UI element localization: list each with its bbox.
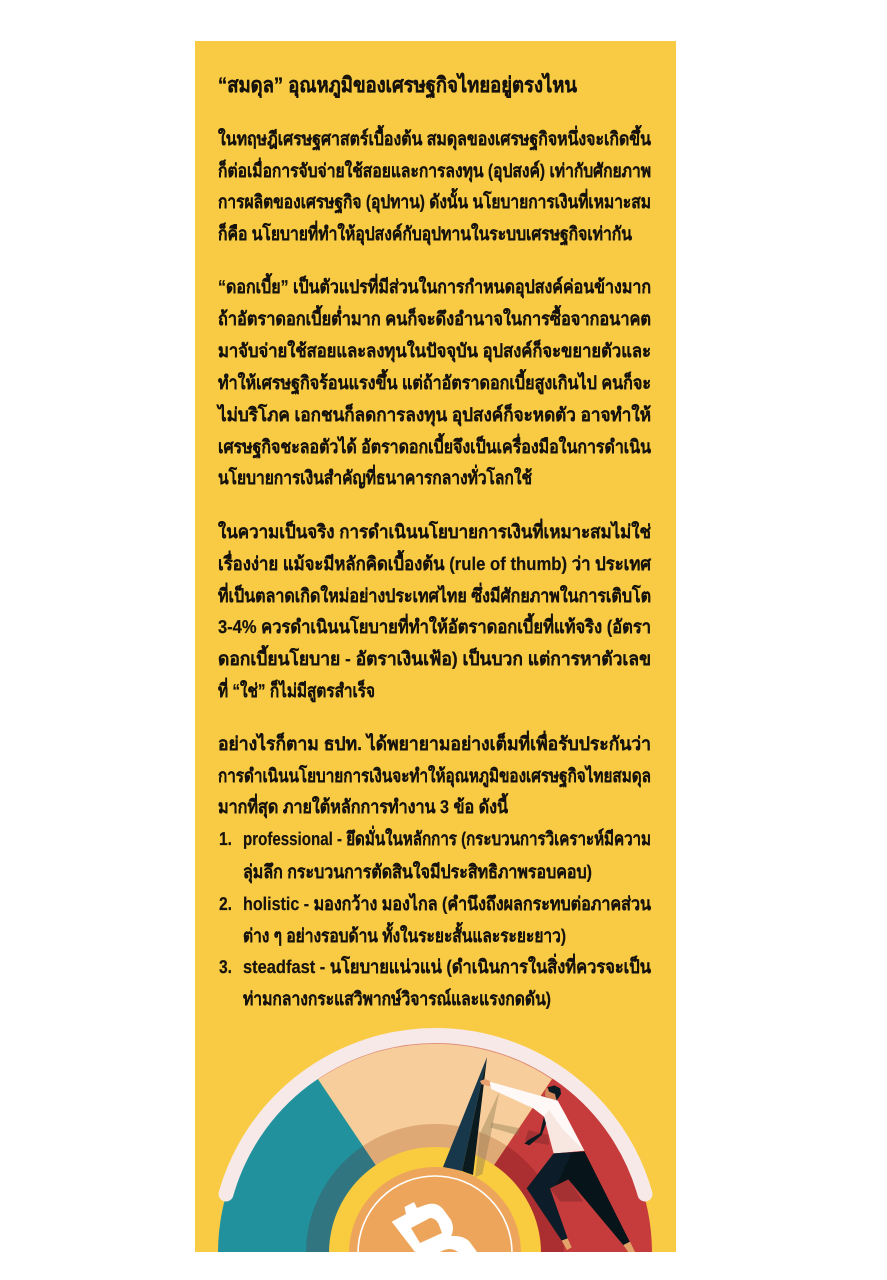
text block: paragraph 2: “ดอกเบี้ย” เป็นตัวแปรที่มีส่วนในการกำหนดอุปสงค์ค่อนข้างมาก xyxy=(218,273,651,299)
text block: paragraph 2: เศรษฐกิจชะลอตัวได้ อัตราดอกเบี้ยจึงเป็นเครื่องมือในการดำเนิน xyxy=(218,433,651,459)
text block: paragraph 2: ถ้าอัตราดอกเบี้ยต่ำมาก คนก็จะดึงอำนาจในการซื้อจากอนาคต xyxy=(218,305,651,329)
hand xyxy=(480,1079,491,1086)
numbered list: three principles: steadfast - นโยบายแน่วแน่ (ดำเนินการในสิ่งที่ควรจะเป็น xyxy=(243,953,651,977)
gauge: white rim arc xyxy=(226,1035,645,1194)
numbered list: three principles: 1. xyxy=(219,828,232,849)
numbered list: three principles: holistic - มองกว้าง มองไกล (คำนึงถึงผลกระทบต่อภาคส่วน xyxy=(243,893,651,914)
text block: paragraph 2 xyxy=(216,273,651,489)
head xyxy=(545,1088,558,1100)
numbered list: three principles: 3. xyxy=(219,956,232,977)
text block: paragraph 4: อย่างไรก็ตาม ธปท. ได้พยายามอย่างเต็มที่เพื่อรับประกันว่า xyxy=(218,730,651,754)
numbered list: three principles: ต่าง ๆ อย่างรอบด้าน ทั้งในระยะสั้นและระยะยาว) xyxy=(243,922,566,946)
text block: paragraph 3: ที่เป็นตลาดเกิดใหม่อย่างประเทศไทย ซึ่งมีศักยภาพในการเติบโต xyxy=(218,582,651,606)
gauge needle xyxy=(443,1057,487,1175)
gauge: yellow hub xyxy=(329,1147,541,1253)
numbered list: three principles xyxy=(219,825,651,1009)
numbered list: three principles: 2. xyxy=(219,893,232,914)
text block: paragraph 4 xyxy=(218,730,651,819)
numbered list: three principles: ลุ่มลึก กระบวนการตัดสินใจมีประสิทธิภาพรอบคอบ) xyxy=(243,861,592,884)
text block: paragraph 3: เรื่องง่าย แม้จะมีหลักคิดเบื้องต้น (rule of thumb) ว่า ประเทศ xyxy=(218,550,652,574)
text block: paragraph 4: มากที่สุด ภายใต้หลักการทำงาน 3 ข้อ ดังนี้ xyxy=(218,793,509,819)
gauge: thin red line under rim xyxy=(318,1043,552,1079)
text block: paragraph 2: ทำให้เศรษฐกิจร้อนแรงขึ้น แต่ถ้าอัตราดอกเบี้ยสูงเกินไป คนก็จะ xyxy=(218,369,651,395)
feet xyxy=(562,1238,572,1250)
numbered list: three principles: professional - ยึดมั่นในหลักการ (กระบวนการวิเคราะห์มีความ xyxy=(243,825,651,849)
icon: bitcoin symbol xyxy=(392,1202,477,1252)
gauge: red zone xyxy=(494,1078,652,1252)
shirt xyxy=(490,1082,584,1153)
trousers xyxy=(527,1151,630,1245)
text block: paragraph 2: ไม่บริโภค เอกชนก็ลดการลงทุน อุปสงค์ก็จะหดตัว อาจทำให้ xyxy=(216,403,651,427)
gauge: peach zone xyxy=(318,1044,552,1166)
text block: paragraph 1: การผลิตของเศรษฐกิจ (อุปทาน) ดังนั้น นโยบายการเงินที่เหมาะสม xyxy=(218,188,651,214)
gauge illustration xyxy=(218,1035,652,1253)
text block: paragraph 2: นโยบายการเงินสำคัญที่ธนาคารกลางทั่วโลกใช้ xyxy=(218,464,532,489)
text block: paragraph 3 xyxy=(218,518,652,703)
text block: paragraph 1: ก็คือ นโยบายที่ทำให้อุปสงค์กับอุปทานในระบบเศรษฐกิจเท่ากัน xyxy=(218,220,632,246)
title: “สมดุล” อุณหภูมิของเศรษฐกิจไทยอยู่ตรงไหน xyxy=(218,72,578,99)
businessman pushing the needle xyxy=(480,1079,635,1252)
text block: paragraph 1: ในทฤษฎีเศรษฐศาสตร์เบื้องต้น สมดุลของเศรษฐกิจหนึ่งจะเกิดขึ้น xyxy=(218,125,651,151)
bitcoin coin xyxy=(349,1167,521,1253)
panel: yellow background xyxy=(195,41,676,1252)
numbered list: three principles: ท่ามกลางกระแสวิพากษ์วิจารณ์และแรงกดดัน) xyxy=(243,988,551,1009)
text block: paragraph 1 xyxy=(218,125,651,246)
text block: paragraph 2: มาจับจ่ายใช้สอยและลงทุนในปัจจุบัน อุปสงค์ก็จะขยายตัวและ xyxy=(218,339,651,363)
text block: paragraph 4: การดำเนินนโยบายการเงินจะทำให้อุณหภูมิของเศรษฐกิจไทยสมดุล xyxy=(218,764,651,788)
text block: paragraph 3: 3-4% ควรดำเนินนโยบายที่ทำให้อัตราดอกเบี้ยที่แท้จริง (อัตรา xyxy=(218,613,651,637)
text block: paragraph 3: ในความเป็นจริง การดำเนินนโยบายการเงินที่เหมาะสมไม่ใช่ xyxy=(218,518,651,542)
tie xyxy=(524,1117,546,1145)
text block: paragraph 3: ดอกเบี้ยนโยบาย - อัตราเงินเฟ้อ) เป็นบวก แต่การหาตัวเลข xyxy=(218,645,651,669)
needle and arm shadow xyxy=(475,1092,520,1177)
man's cast shadow xyxy=(525,1130,549,1145)
text block: paragraph 3: ที่ “ใช่” ก็ไม่มีสูตรสำเร็จ xyxy=(218,677,375,703)
gauge: teal zone xyxy=(218,1079,376,1252)
text block: paragraph 1: ก็ต่อเมื่อการจับจ่ายใช้สอยและการลงทุน (อุปสงค์) เท่ากับศักยภาพ xyxy=(218,157,651,183)
